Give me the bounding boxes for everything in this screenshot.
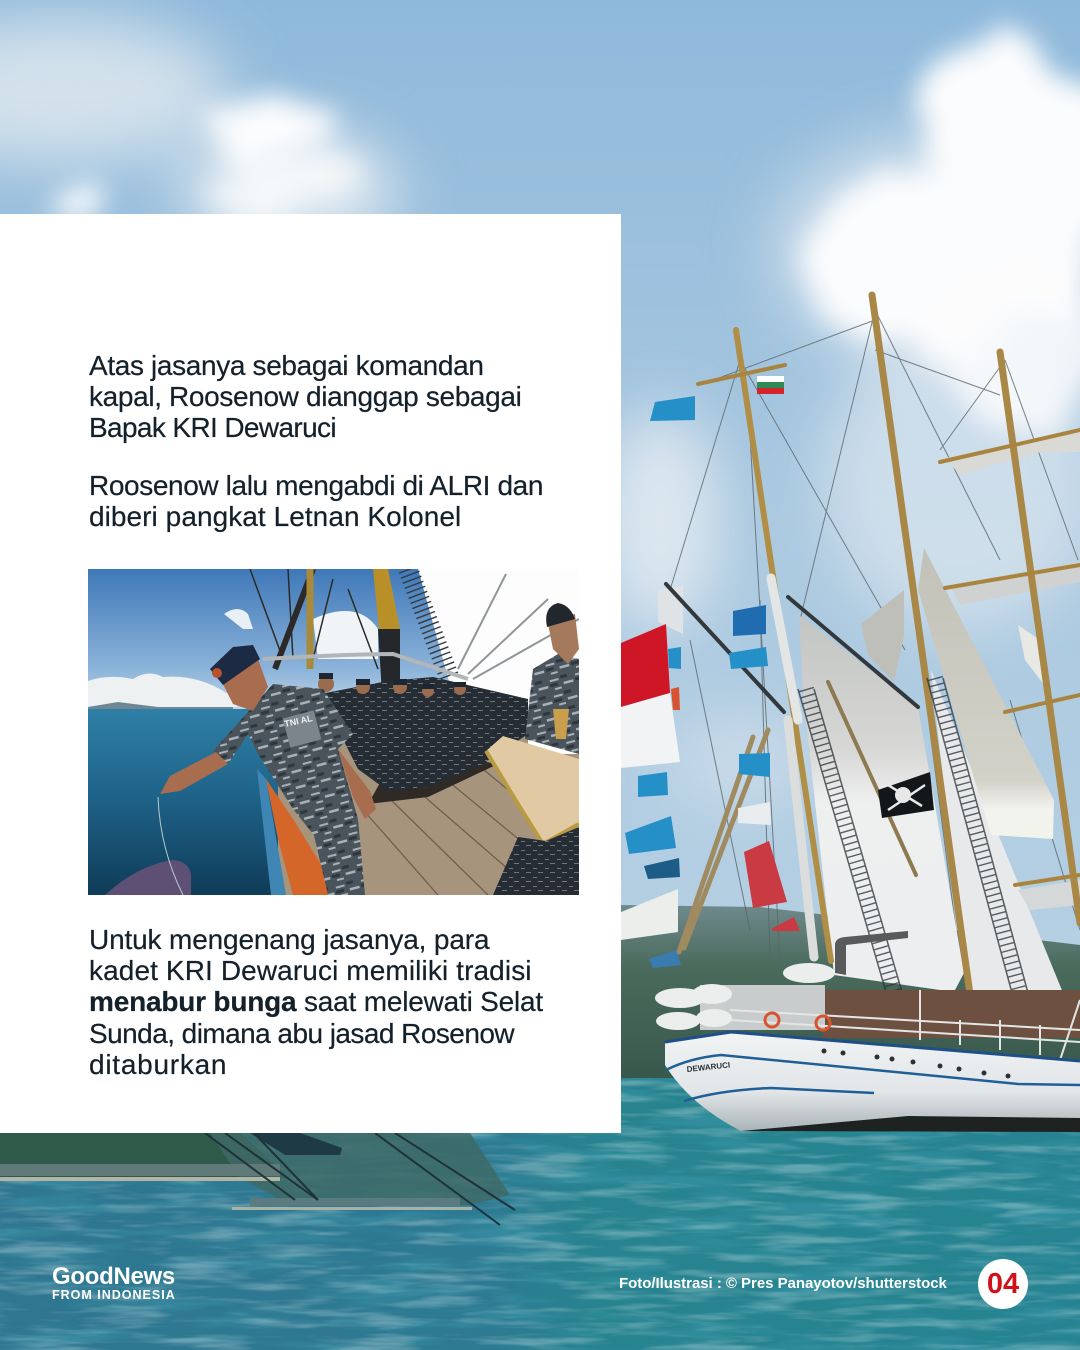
hull [665,1032,1080,1132]
logo: GoodNews from Indonesia: GoodNews [52,1263,175,1290]
sailor on the right with tray [486,603,579,895]
paragraph: service in ALRI: Roosenow lalu mengabdi di ALRI dan [89,470,543,501]
logo: GoodNews from Indonesia: FROM INDONESIA [52,1288,176,1302]
row of cadets [318,673,528,791]
paragraph: Roosenow as father of KRI Dewaruci: Bapak KRI Dewaruci [89,412,336,443]
square sails on rear mast [945,430,1080,475]
deck structures [655,931,1080,1060]
sky and sea [88,569,449,895]
main sail [799,615,964,992]
sailor in foreground: TNI AL [283,713,314,729]
paragraph: service in ALRI [89,470,543,532]
paragraph: service in ALRI: diberi pangkat Letnan Kolonel [89,501,461,532]
page number badge [978,1259,1028,1309]
rigging lines [670,310,1080,960]
masts and spars [666,295,1080,1030]
sea with waves [0,1078,1080,1350]
paragraph: flower scattering tradition: kadet KRI Dewaruci memiliki tradisi [89,955,532,986]
distant hills [621,905,1080,1085]
logo: GoodNews from Indonesia [52,1263,176,1302]
white text panel [0,214,621,1133]
lower jib sail [931,670,1068,1005]
hull: DEWARUCI [686,1060,731,1074]
paragraph: Roosenow as father of KRI Dewaruci: kapal, Roosenow dianggap sebagai [89,381,521,412]
furled sail [861,590,904,682]
rope ladders [798,678,1038,1030]
far shore overlay [0,1133,515,1225]
signal flags [625,396,770,968]
paragraph: flower scattering tradition: Sunda, dimana abu jasad Rosenow [89,1018,514,1049]
photo credit: Foto/Ilustrasi : © Pres Panayotov/shutterstock [619,1275,947,1292]
paragraph: Roosenow as father of KRI Dewaruci [88,350,521,444]
paragraph: flower scattering tradition: ditaburkan [89,1049,227,1080]
paragraph: flower scattering tradition: Untuk mengenang jasanya, para [89,924,489,955]
upper jib sail [918,548,1054,839]
paragraph: flower scattering tradition [89,924,544,1080]
ship [621,295,1080,1132]
paragraph: Roosenow as father of KRI Dewaruci: Atas jasanya sebagai komandan [89,350,484,381]
Indonesian flag [621,624,680,768]
page number badge: 04 [987,1268,1019,1300]
masts and rigging [250,569,579,679]
top flag behind boom [658,586,683,634]
main mast [373,569,400,629]
sailor in foreground [160,645,376,895]
photo: navy cadets scattering flowers from the ship deck [88,569,579,895]
paragraph: flower scattering tradition: menabur bunga saat melewati Selat [89,986,543,1017]
hull rail [257,769,328,895]
pirate flag [878,772,934,818]
deck [278,736,579,895]
